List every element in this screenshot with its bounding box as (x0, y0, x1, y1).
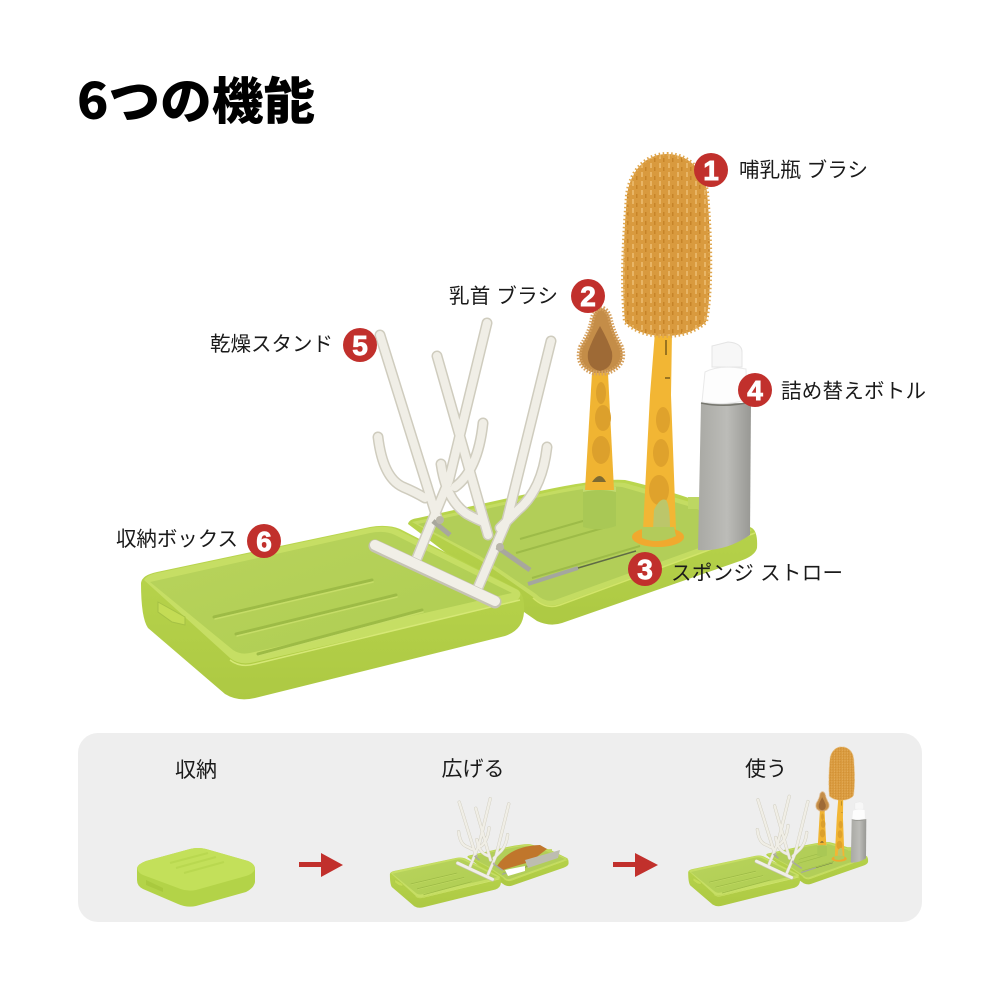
badge 3 with label: sponge straw: 3 (637, 554, 653, 585)
badge 6 with label: storage box: 6 (256, 526, 272, 557)
storage box: right tray (408, 480, 757, 625)
drying stand (375, 323, 551, 602)
badge 1 with label: baby bottle brush: 哺乳瓶 ブラシ (739, 158, 868, 182)
badge 2 with label: nipple brush: 2 (580, 281, 596, 312)
storage box: left tray (141, 526, 524, 699)
badge 1 with label: baby bottle brush: 1 (703, 155, 719, 186)
icon: closed box (137, 848, 255, 907)
brush cup holder (583, 485, 616, 529)
badge 4 with label: refill bottle: 詰め替えボトル (781, 380, 926, 403)
badge 5 with label: drying stand: 乾燥スタンド (210, 333, 333, 356)
badge 2 with label: nipple brush: 乳首 ブラシ (449, 284, 558, 308)
badge 2 with label: nipple brush (449, 279, 605, 313)
nipple brush (579, 308, 623, 490)
refill bottle (698, 342, 751, 550)
badge 5 with label: drying stand (210, 328, 377, 362)
badge 3 with label: sponge straw: スポンジ ストロー (671, 562, 843, 585)
arrow 2 (613, 853, 658, 877)
badge 1 with label: baby bottle brush (694, 153, 868, 187)
product illustration (141, 154, 757, 699)
panel: usage steps (78, 733, 922, 922)
title: 6つの機能 (77, 62, 315, 134)
badge 4 with label: refill bottle: 4 (747, 375, 763, 406)
icon: box in use with brushes (688, 747, 868, 906)
badge 3 with label: sponge straw (628, 552, 843, 586)
badge 5 with label: drying stand: 5 (352, 330, 368, 361)
step label: store: 収納 (175, 759, 217, 782)
badge 6 with label: storage box (116, 524, 281, 558)
badge 4 with label: refill bottle (738, 373, 926, 407)
bottle brush (623, 154, 710, 547)
arrow 1 (299, 853, 343, 877)
icon: opened box with stand (390, 799, 569, 908)
step label: open: 広げる (442, 758, 504, 781)
badge 6 with label: storage box: 収納ボックス (116, 528, 238, 551)
step label: use: 使う (745, 758, 787, 781)
